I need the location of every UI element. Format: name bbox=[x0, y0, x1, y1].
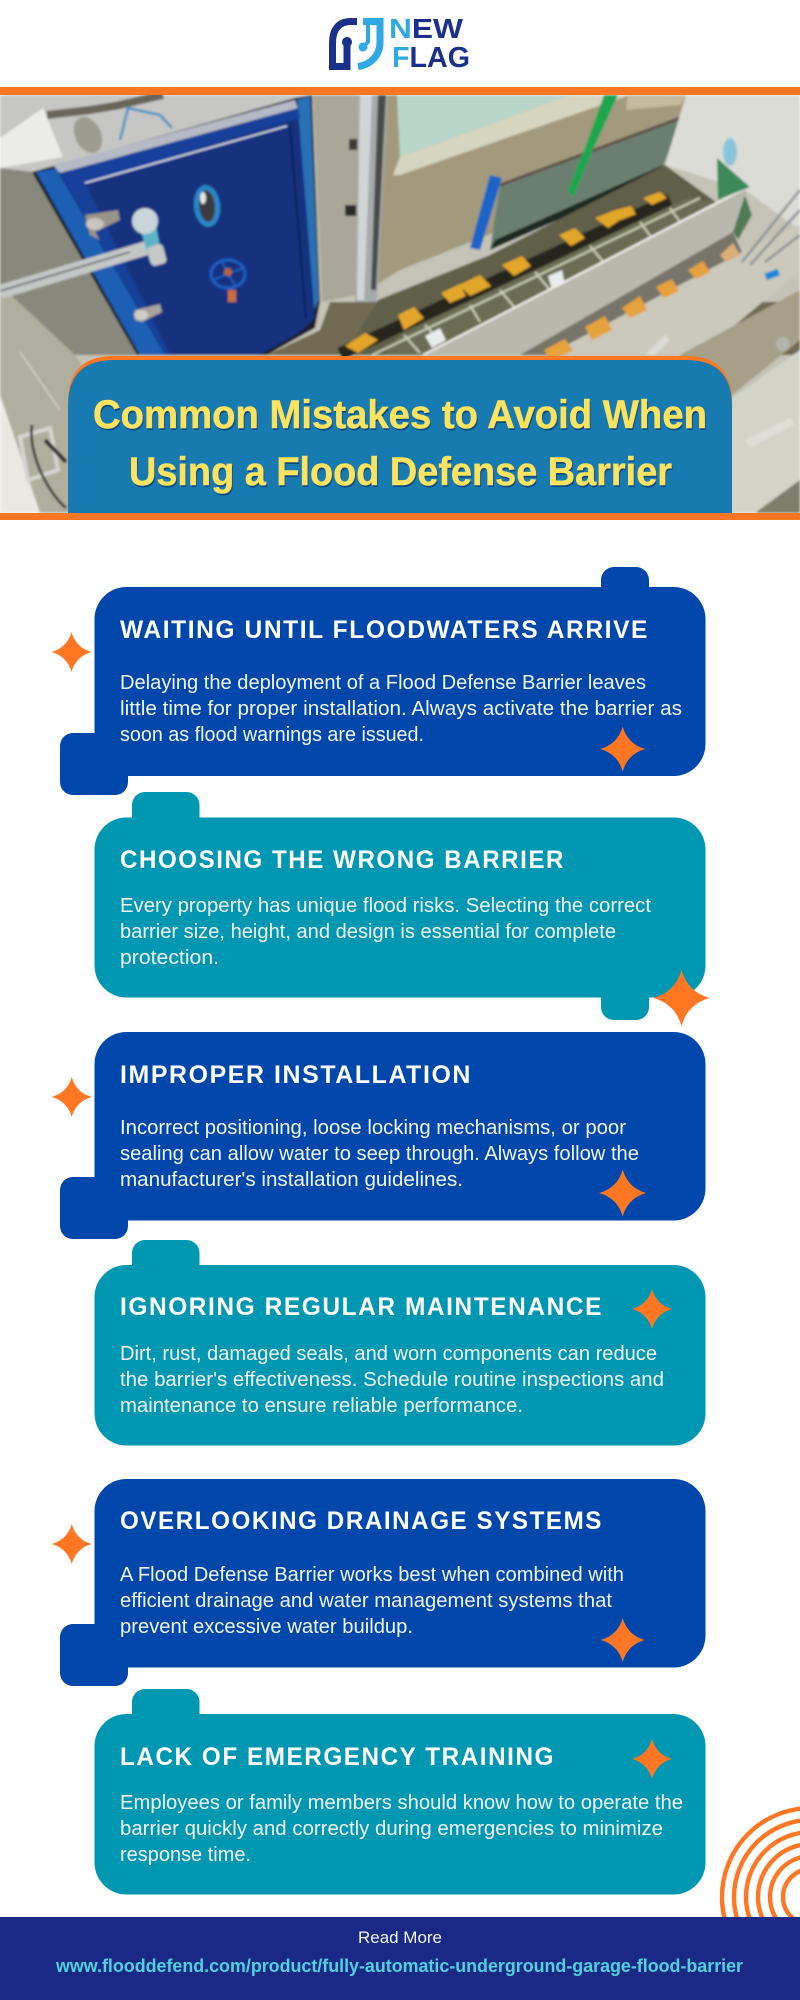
icon: star on panel 2 corner bbox=[654, 970, 710, 1026]
title panel bbox=[68, 356, 732, 513]
orange top band bbox=[0, 87, 800, 95]
panel: choosing the wrong barrier bbox=[94, 792, 706, 1020]
body text: Incorrect positioning, loose locking mechanisms, or poor bbox=[120, 1117, 626, 1139]
body text: maintenance to ensure reliable performance. bbox=[120, 1395, 523, 1417]
panel: overlooking drainage systems bbox=[60, 1479, 706, 1686]
title line 1: Common Mistakes to Avoid When bbox=[93, 393, 707, 437]
body text: Employees or family members should know how to operate the bbox=[120, 1792, 683, 1814]
body text: A Flood Defense Barrier works best when combined with bbox=[120, 1564, 624, 1586]
icon: star in panel 5 bbox=[601, 1618, 645, 1662]
logo: New Flag bbox=[332, 13, 470, 74]
body text: response time. bbox=[120, 1844, 251, 1866]
decorative concentric arcs bbox=[720, 1806, 800, 1917]
body text bbox=[120, 1343, 664, 1417]
icon: star in panel 1 bbox=[600, 726, 645, 772]
body text: barrier size, height, and design is essential for complete bbox=[120, 921, 616, 943]
icon: star in panel 6 bbox=[632, 1739, 672, 1779]
header photo: flood door and barrier bbox=[0, 95, 800, 513]
body text: protection. bbox=[120, 947, 219, 969]
icon: star in panel 4 bbox=[632, 1289, 672, 1329]
heading: WAITING UNTIL FLOODWATERS ARRIVE bbox=[120, 616, 649, 644]
heading: LACK OF EMERGENCY TRAINING bbox=[120, 1743, 555, 1771]
body text: prevent excessive water buildup. bbox=[120, 1616, 413, 1638]
body text: manufacturer's installation guidelines. bbox=[120, 1169, 463, 1191]
panel: waiting until floodwaters arrive bbox=[60, 567, 706, 795]
body text: Dirt, rust, damaged seals, and worn components can reduce bbox=[120, 1343, 657, 1365]
body text: barrier quickly and correctly during emergencies to minimize bbox=[120, 1818, 663, 1840]
heading: CHOOSING THE WRONG BARRIER bbox=[120, 846, 565, 874]
icon: star left of panel 1 bbox=[52, 632, 92, 672]
icon: star left of panel 3 bbox=[52, 1077, 92, 1117]
logo: New Flag: NEW bbox=[389, 13, 464, 44]
icon: star left of panel 5 bbox=[52, 1524, 92, 1564]
body text bbox=[120, 672, 682, 746]
heading: IGNORING REGULAR MAINTENANCE bbox=[120, 1293, 603, 1321]
body text: the barrier's effectiveness. Schedule routine inspections and bbox=[120, 1369, 664, 1391]
body text: Delaying the deployment of a Flood Defense Barrier leaves bbox=[120, 672, 646, 694]
footer band bbox=[0, 1917, 800, 2000]
body text bbox=[120, 1117, 639, 1191]
body text bbox=[120, 1792, 683, 1866]
footer url: www.flooddefend.com/product/fully-automatic-underground-garage-flood-barrier bbox=[55, 1956, 743, 1976]
body text: soon as flood warnings are issued. bbox=[120, 724, 424, 746]
icon: star in panel 3 bbox=[599, 1170, 646, 1216]
title line 2 shadow: Using a Flood Defense Barrier bbox=[130, 452, 673, 496]
panel: lack of emergency training bbox=[94, 1689, 706, 1894]
body text bbox=[120, 895, 651, 969]
title line 1 shadow: Common Mistakes to Avoid When bbox=[94, 395, 708, 439]
panel: ignoring regular maintenance bbox=[94, 1240, 706, 1446]
body text bbox=[120, 1564, 624, 1638]
logo: New Flag: FLAG bbox=[392, 42, 470, 74]
title line 2: Using a Flood Defense Barrier bbox=[129, 450, 672, 494]
orange bottom band bbox=[0, 513, 800, 520]
panel: improper installation bbox=[60, 1032, 706, 1239]
body text: sealing can allow water to seep through. Always follow the bbox=[120, 1143, 639, 1165]
heading: IMPROPER INSTALLATION bbox=[120, 1061, 472, 1089]
read more label: Read More bbox=[358, 1928, 442, 1947]
body text: efficient drainage and water management systems that bbox=[120, 1590, 612, 1612]
body text: Every property has unique flood risks. Selecting the correct bbox=[120, 895, 651, 917]
heading: OVERLOOKING DRAINAGE SYSTEMS bbox=[120, 1507, 603, 1535]
body text: little time for proper installation. Always activate the barrier as bbox=[120, 698, 682, 720]
